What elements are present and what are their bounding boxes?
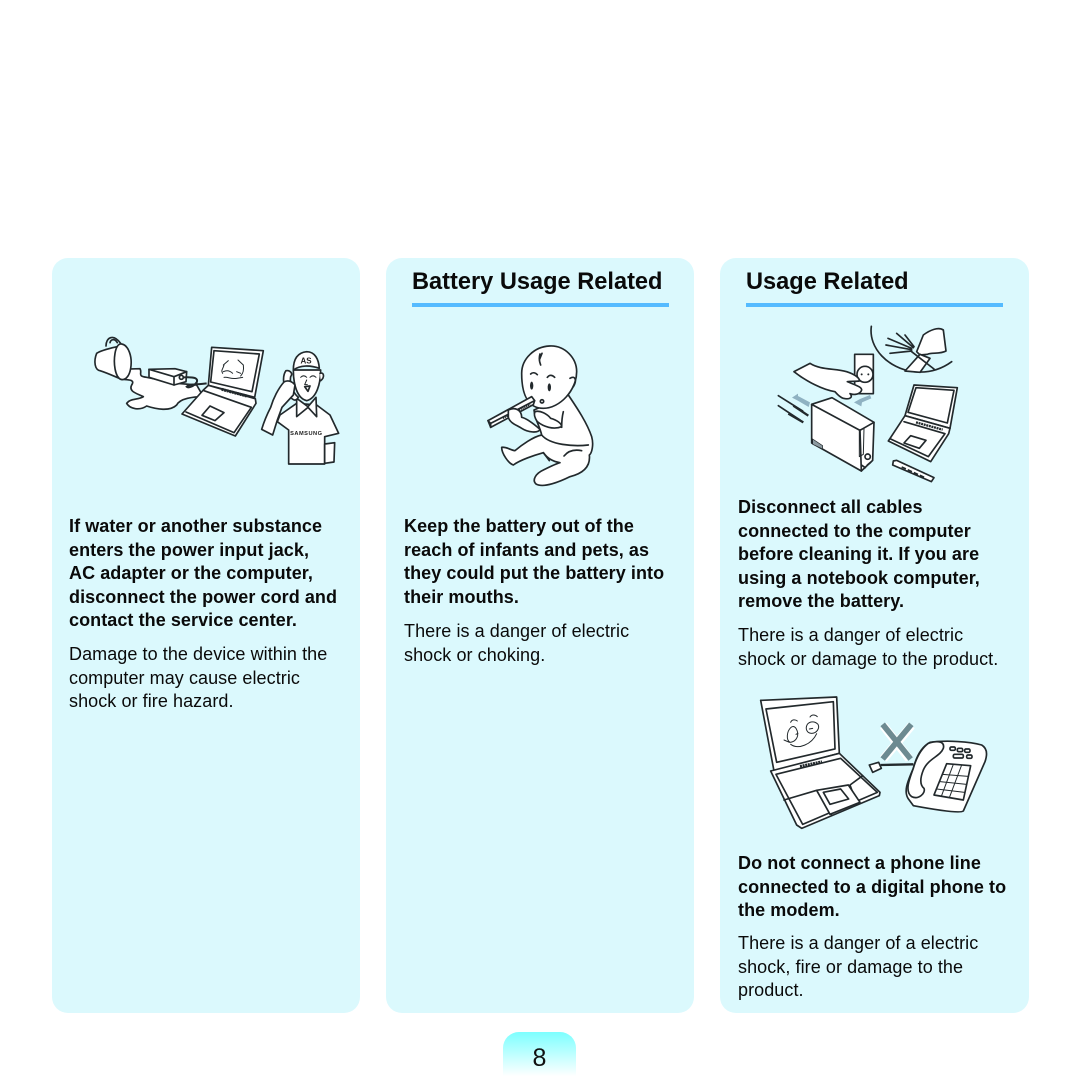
warning text: phone line: connected to a digital phone to bbox=[738, 876, 1006, 896]
warning text: water or substance: disconnect the power cord and bbox=[69, 586, 337, 606]
icon: smiling laptop bbox=[761, 697, 880, 828]
warning text: keep battery away bbox=[404, 516, 664, 606]
icon: computer tower bbox=[812, 398, 874, 471]
page number tab bbox=[503, 1032, 576, 1080]
icon: removed battery bbox=[893, 460, 934, 482]
icon: service technician with phone bbox=[262, 352, 339, 464]
body text: fire or damage: product. bbox=[738, 980, 804, 1000]
illustration: unplugging, cleaning and removing battery bbox=[778, 326, 957, 482]
body text: damage to product: shock or damage to the product. bbox=[738, 648, 998, 668]
icon: baby body and legs bbox=[502, 395, 593, 485]
heading: Usage Related: Usage Related bbox=[746, 269, 909, 295]
body text: damage: computer may cause electric bbox=[69, 668, 300, 688]
page number tab: 8 bbox=[533, 1044, 546, 1072]
body text: choking bbox=[404, 621, 629, 665]
warning text: disconnect cables: remove the battery. bbox=[738, 591, 904, 611]
warning text: disconnect cables: using a notebook computer, bbox=[738, 568, 980, 588]
body text: fire or damage bbox=[738, 933, 978, 1000]
panel: usage background bbox=[720, 258, 1029, 1013]
icon: battery bbox=[488, 397, 535, 427]
heading underline: battery bbox=[412, 303, 669, 307]
icon: AC adapter bbox=[149, 369, 207, 387]
body text: damage: Damage to the device within the bbox=[69, 644, 327, 664]
illustration: laptop, modem cable and telephone with X bbox=[761, 697, 986, 828]
warning text: disconnect cables: before cleaning it. If you are bbox=[738, 544, 979, 564]
body text: damage bbox=[69, 644, 327, 711]
warning text: disconnect cables bbox=[738, 497, 980, 611]
icon: hand pulling plug bbox=[794, 363, 862, 399]
warning text: phone line: the modem. bbox=[738, 900, 840, 920]
icon: telephone bbox=[906, 741, 986, 812]
panel: left background bbox=[52, 258, 360, 1013]
icon: cleaning inset circle bbox=[871, 326, 952, 372]
body text: choking: shock or choking. bbox=[404, 644, 545, 664]
warning text: phone line: Do not connect a phone line bbox=[738, 853, 981, 873]
warning text: water or substance: enters the power input jack, bbox=[69, 540, 309, 560]
body text: damage to product: There is a danger of electric bbox=[738, 625, 963, 645]
body text: damage: shock or fire hazard. bbox=[69, 691, 234, 711]
heading: Battery Usage Related: Battery Usage Related bbox=[412, 269, 662, 295]
warning text: disconnect cables: Disconnect all cables bbox=[738, 497, 923, 517]
panel: battery usage background bbox=[386, 258, 694, 1013]
warning text: phone line bbox=[738, 853, 1006, 920]
icon: phone cable and connector bbox=[869, 762, 913, 772]
icon: removal arrows bbox=[792, 394, 871, 407]
illustration: baby chewing on battery bbox=[488, 346, 593, 485]
warning text: keep battery away: they could put the battery into bbox=[404, 563, 664, 583]
icon: service technician with phone: SAMSUNG bbox=[290, 431, 323, 437]
icon: audio cables bbox=[778, 396, 803, 420]
warning text: water or substance: If water or another substance bbox=[69, 516, 322, 536]
icon: baby head bbox=[522, 346, 577, 408]
warning text: disconnect cables: connected to the computer bbox=[738, 520, 971, 540]
warning text: water or substance: AC adapter or the computer, bbox=[69, 563, 313, 583]
warning text: keep battery away: Keep the battery out of the bbox=[404, 516, 634, 536]
body text: fire or damage: There is a danger of a electric bbox=[738, 933, 978, 953]
body text: damage to product bbox=[738, 625, 998, 669]
icon: spilled liquid bbox=[118, 369, 203, 409]
heading underline: usage bbox=[746, 303, 1003, 307]
icon: wall outlet bbox=[855, 354, 873, 394]
warning text: keep battery away: their mouths. bbox=[404, 586, 519, 606]
body text: fire or damage: shock, fire or damage to the bbox=[738, 956, 963, 976]
warning text: water or substance bbox=[69, 516, 337, 630]
body text: choking: There is a danger of electric bbox=[404, 621, 629, 641]
icon: X mark bbox=[883, 726, 911, 759]
icon: tipped cup bbox=[95, 337, 131, 380]
icon: service technician with phone: AS bbox=[300, 357, 312, 366]
warning text: water or substance: contact the service center. bbox=[69, 610, 297, 630]
icon: laptop with sad face bbox=[182, 347, 263, 436]
icon: open laptop bbox=[888, 385, 957, 462]
icon: baby hands and arms bbox=[508, 409, 540, 432]
warning text: keep battery away: reach of infants and pets, as bbox=[404, 540, 649, 560]
illustration: spilled cup, adapter, laptop and service technician bbox=[95, 337, 339, 464]
icon: X mark center bbox=[883, 724, 911, 759]
